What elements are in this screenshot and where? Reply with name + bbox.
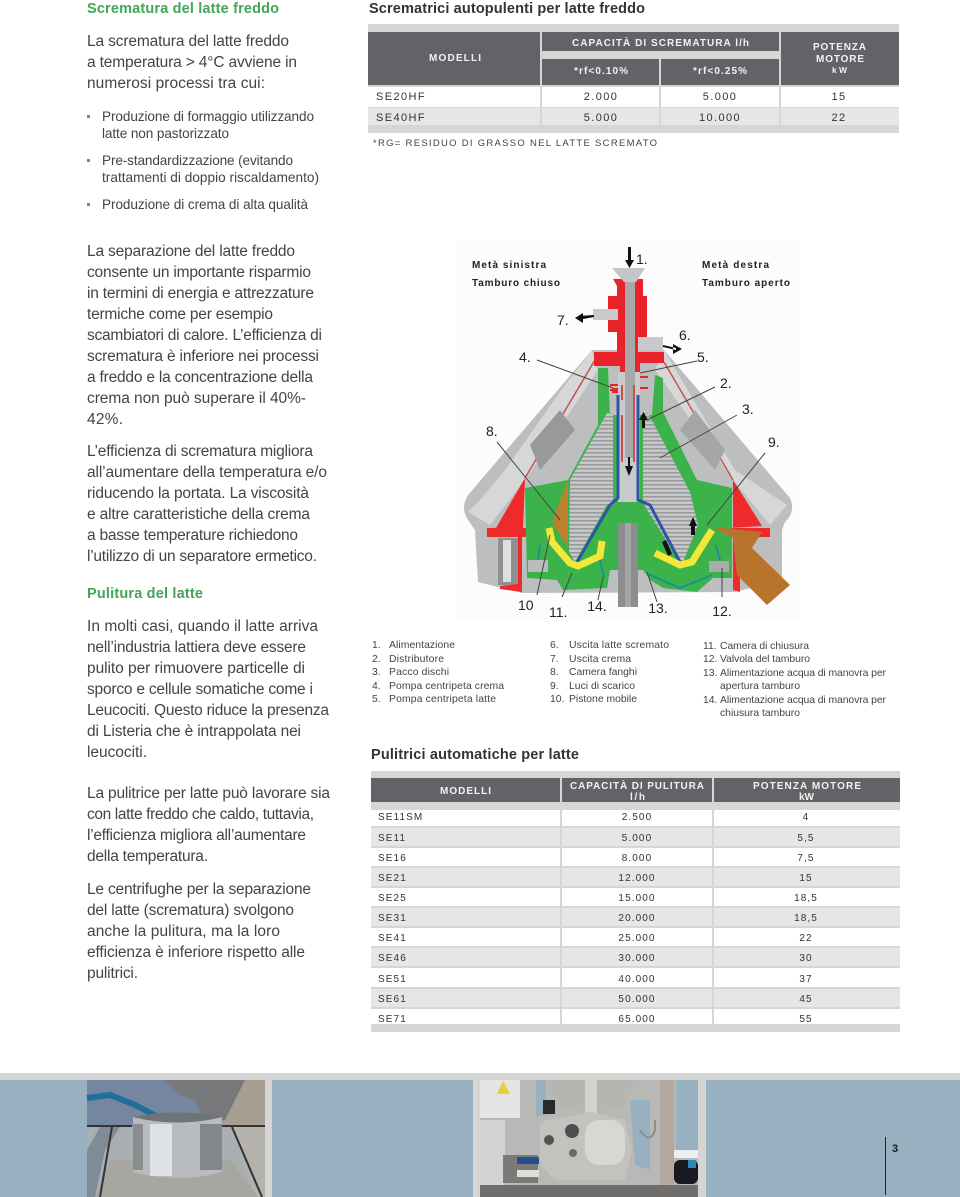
legend: column 1: Pacco dischi [389, 667, 449, 678]
black arrows [575, 247, 697, 556]
table: pulitrici: SE46 [378, 953, 407, 964]
table: pulitrici: SE11 [378, 833, 406, 844]
table: scrematrici: MODELLI [429, 53, 481, 64]
table: pulitrici: 22 [799, 933, 813, 944]
heading: scrematrici autopulenti: Scrematrici autopulenti per latte freddo [369, 1, 645, 17]
legend: column 3: 11. [703, 641, 717, 652]
diagram numbers: 13. [648, 600, 668, 616]
table: pulitrici: 8.000 [622, 853, 652, 864]
diagram: separator cross-section: Metà destra [702, 260, 769, 271]
diagram numbers: 8. [486, 423, 498, 439]
table: pulitrici: SE61 [378, 994, 407, 1005]
legend: column 1: Pompa centripeta crema [389, 681, 504, 692]
diagram numbers [486, 251, 780, 620]
central tube [618, 372, 640, 502]
table: pulitrici: SE25 [378, 893, 407, 904]
legend: column 2: Camera fanghi [569, 667, 637, 678]
text block: separazione a freddo: termiche come per esempio [87, 306, 273, 323]
text block: efficienza: all’aumentare della temperatura e/o [87, 464, 327, 481]
heading: pulitura del latte: Pulitura del latte [87, 586, 203, 602]
table: pulitrici [371, 771, 900, 1032]
text block: pulitura: nell’industria lattiera deve essere [87, 639, 306, 656]
diagram numbers: 1. [636, 251, 648, 267]
text block: separazione a freddo [87, 243, 322, 428]
diagram numbers: 6. [679, 327, 691, 343]
heading: scrematura del latte freddo: Scrematura del latte freddo [87, 1, 279, 17]
legend: column 1: Pompa centripeta latte [389, 694, 496, 705]
table: scrematrici: SE40HF [376, 112, 426, 124]
bullet list: applications: Produzione di crema di alta qualità [102, 197, 308, 212]
diagram numbers: 2. [720, 375, 732, 391]
photo: separator machine [480, 1080, 698, 1197]
table: scrematrici: SE20HF [376, 91, 426, 103]
bullet list: applications: Pre-standardizzazione (evitando [102, 153, 293, 168]
legend: column 3: chiusura tamburo [720, 708, 800, 719]
table: pulitrici: 30 [799, 953, 813, 964]
text block: intro: numerosi processi tra cui: [87, 75, 265, 92]
diagram numbers: 14. [587, 598, 607, 614]
table: pulitrici: SE51 [378, 974, 407, 985]
text block: separazione a freddo: crema non può superare il 40%- [87, 390, 306, 407]
text block: pulitrice: con latte freddo che caldo, tuttavia, [87, 806, 314, 823]
text block: centrifughe: pulitrici. [87, 965, 138, 982]
legend: column 3: Alimentazione acqua di manovra per [720, 695, 887, 706]
text block: separazione a freddo: in termini di energia e attrezzature [87, 285, 314, 302]
text block: pulitura: Leucociti. Questo riduce la presenza [87, 702, 329, 719]
legend: column 3: Valvola del tamburo [720, 654, 810, 665]
table: scrematrici [368, 24, 899, 133]
legend: column 1: 5. [372, 694, 381, 705]
table: scrematrici: 2.000 [584, 91, 618, 103]
table: pulitrici: 40.000 [618, 974, 656, 985]
text block: efficienza: e altre caratteristiche della crema [87, 506, 310, 523]
text block: pulitura: pulito per rimuovere particelle di [87, 660, 305, 677]
legend: column 1: 2. [372, 654, 381, 665]
text block: separazione a freddo: consente un importante risparmio [87, 264, 311, 281]
footer band [0, 1073, 960, 1197]
diagram numbers: 12. [712, 603, 732, 619]
table: pulitrici: SE41 [378, 933, 407, 944]
table: pulitrici: 15 [799, 873, 813, 884]
outer bowl [464, 350, 792, 593]
legend: column 2: Uscita latte scremato [569, 640, 669, 651]
legend: column 2: 10. [550, 694, 564, 705]
page number: 3 [892, 1143, 898, 1155]
table: pulitrici: 50.000 [618, 994, 656, 1005]
table: pulitrici: 12.000 [618, 873, 656, 884]
heading: pulitrici automatiche: Pulitrici automatiche per latte [371, 747, 579, 763]
text block: efficienza [87, 443, 327, 565]
text block: separazione a freddo: a freddo e la concentrazione della [87, 369, 313, 386]
legend: column 1: 1. [372, 640, 381, 651]
table: pulitrici: 15.000 [618, 893, 656, 904]
diagram: separator cross-section: Tamburo chiuso [472, 278, 560, 289]
diagram: separator cross-section: Metà sinistra [472, 260, 546, 271]
table: pulitrici: 55 [799, 1014, 813, 1025]
table: pulitrici: 25.000 [618, 933, 656, 944]
bullet list: applications: Produzione di formaggio utilizzando [102, 109, 314, 124]
text block: pulitrice: della temperatura. [87, 848, 208, 865]
table: pulitrici: 20.000 [618, 913, 656, 924]
legend: column 3: 12. [703, 654, 717, 665]
legend: column 2: 6. [550, 640, 559, 651]
table: pulitrici: 37 [799, 974, 813, 985]
photo: machining a bowl [87, 1080, 265, 1197]
text block: efficienza: L’efficienza di scrematura migliora [87, 443, 313, 460]
table: scrematrici: *rf<0.10% [574, 66, 628, 77]
table: scrematrici: 5.000 [584, 112, 618, 124]
table: pulitrici: 5,5 [797, 833, 815, 844]
table: pulitrici: MODELLI [440, 786, 491, 797]
legend: column 2: 9. [550, 681, 559, 692]
text block: separazione a freddo: scambiatori di calore. L’efficienza di [87, 327, 322, 344]
page number [885, 1137, 898, 1195]
table: scrematrici: CAPACITÀ DI SCREMATURA l/h [572, 36, 749, 49]
brown sludge [552, 480, 568, 548]
table: scrematrici: kW [832, 65, 848, 75]
legend: column 1 [372, 640, 504, 705]
diagram: separator cross-section [456, 240, 800, 622]
table: pulitrici: 4 [803, 812, 809, 823]
text block: pulitura: leucociti. [87, 744, 147, 761]
table: pulitrici: 5.000 [622, 833, 652, 844]
table: scrematrici: *rf<0.25% [693, 66, 747, 77]
legend: column 1: Distributore [389, 654, 444, 665]
yellow seal [549, 528, 602, 566]
legend: column 1: 3. [372, 667, 381, 678]
text block: pulitura: di Listeria che è intrappolata nei [87, 723, 301, 740]
text block: pulitura [87, 618, 329, 761]
legend: column 2: Luci di scarico [569, 681, 635, 692]
legend: column 3 [703, 641, 887, 719]
diagram numbers: 11. [549, 604, 567, 620]
text block: pulitura: sporco e cellule somatiche come i [87, 681, 313, 698]
text block: centrifughe [87, 881, 311, 982]
diagram numbers: 7. [557, 312, 569, 328]
legend: column 3: apertura tamburo [720, 681, 800, 692]
table: scrematrici: 5.000 [703, 91, 737, 103]
table: pulitrici: POTENZA MOTORE [753, 781, 861, 792]
text block: efficienza: riducendo la portata. La viscosità [87, 485, 309, 502]
table: pulitrici: SE31 [378, 913, 407, 924]
table: pulitrici: CAPACITÀ DI PULITURA [570, 779, 704, 792]
text block: pulitura: In molti casi, quando il latte arriva [87, 618, 318, 635]
diagram numbers: 3. [742, 401, 754, 417]
text block: centrifughe: anche la pulitura, ma la loro [87, 923, 280, 940]
table: pulitrici: 65.000 [618, 1014, 656, 1025]
table: scrematrici: 10.000 [699, 112, 741, 124]
disc stacks [569, 413, 613, 562]
text block: pulitrice [87, 785, 330, 865]
text block: efficienza: l’utilizzo di un separatore ermetico. [87, 548, 317, 565]
bullet list: applications [87, 109, 319, 212]
text block: centrifughe: efficienza è inferiore rispetto alle [87, 944, 305, 961]
text block: separazione a freddo: La separazione del latte freddo [87, 243, 295, 260]
text block: intro [87, 33, 297, 92]
diagram numbers: 5. [697, 349, 709, 365]
table: pulitrici: SE71 [378, 1014, 407, 1025]
table: pulitrici: l/h [630, 792, 645, 803]
table: pulitrici: SE21 [378, 873, 407, 884]
legend: column 2: Uscita crema [569, 654, 631, 665]
text block: intro: a temperatura > 4°C avviene in [87, 54, 297, 71]
table: pulitrici: 2.500 [622, 812, 652, 823]
bullet list: applications: trattamenti di doppio riscaldamento) [102, 170, 319, 185]
bullet list: applications: latte non pastorizzato [102, 126, 229, 141]
text block: separazione a freddo: 42%. [87, 411, 123, 428]
legend: column 2: 8. [550, 667, 559, 678]
diagram numbers: 9. [768, 434, 780, 450]
legend: column 1: 4. [372, 681, 381, 692]
red frame [487, 478, 527, 592]
legend: column 3: Camera di chiusura [720, 641, 809, 652]
table: pulitrici: 18,5 [794, 893, 818, 904]
table: scrematrici: POTENZA [813, 42, 866, 53]
table: pulitrici: SE16 [378, 853, 407, 864]
text block: separazione a freddo: scrematura è inferiore nei processi [87, 348, 319, 365]
diagram: separator cross-section: Tamburo aperto [702, 278, 790, 289]
table: scrematrici: 15 [831, 91, 847, 103]
legend: column 2: 7. [550, 654, 559, 665]
table footnote: *RG= RESIDUO DI GRASSO NEL LATTE SCREMATO [373, 138, 657, 149]
legend: column 3: 13. [703, 668, 717, 679]
legend: column 2 [550, 640, 669, 705]
leader lines [497, 360, 765, 602]
table: pulitrici: SE11SM [378, 812, 423, 823]
legend: column 2: Pistone mobile [569, 694, 637, 705]
legend: column 3: 14. [703, 695, 717, 706]
text block: centrifughe: Le centrifughe per la separazione [87, 881, 311, 898]
green body [525, 368, 732, 592]
legend: column 3: Alimentazione acqua di manovra per [720, 668, 887, 679]
table: pulitrici: kW [799, 792, 815, 803]
text block: pulitrice: La pulitrice per latte può lavorare sia [87, 785, 330, 802]
text block: centrifughe: del latte (scrematura) svolgono [87, 902, 294, 919]
grey ports [528, 560, 548, 572]
table: pulitrici: 30.000 [618, 953, 656, 964]
text block: pulitrice: l’efficienza migliora all’aumentare [87, 827, 306, 844]
text block: intro: La scrematura del latte freddo [87, 33, 289, 50]
legend: column 1: Alimentazione [389, 640, 455, 651]
table: pulitrici: 18,5 [794, 913, 818, 924]
table: pulitrici: 45 [799, 994, 813, 1005]
centre cone and spindle [609, 502, 651, 570]
diagram numbers: 10 [518, 597, 534, 613]
diagram numbers: 4. [519, 349, 531, 365]
text block: efficienza: a basse temperature richiedono [87, 527, 298, 544]
table: pulitrici: 7,5 [797, 853, 815, 864]
table: scrematrici: 22 [831, 112, 847, 124]
table: scrematrici: MOTORE [816, 54, 864, 65]
blue lines [577, 395, 618, 562]
